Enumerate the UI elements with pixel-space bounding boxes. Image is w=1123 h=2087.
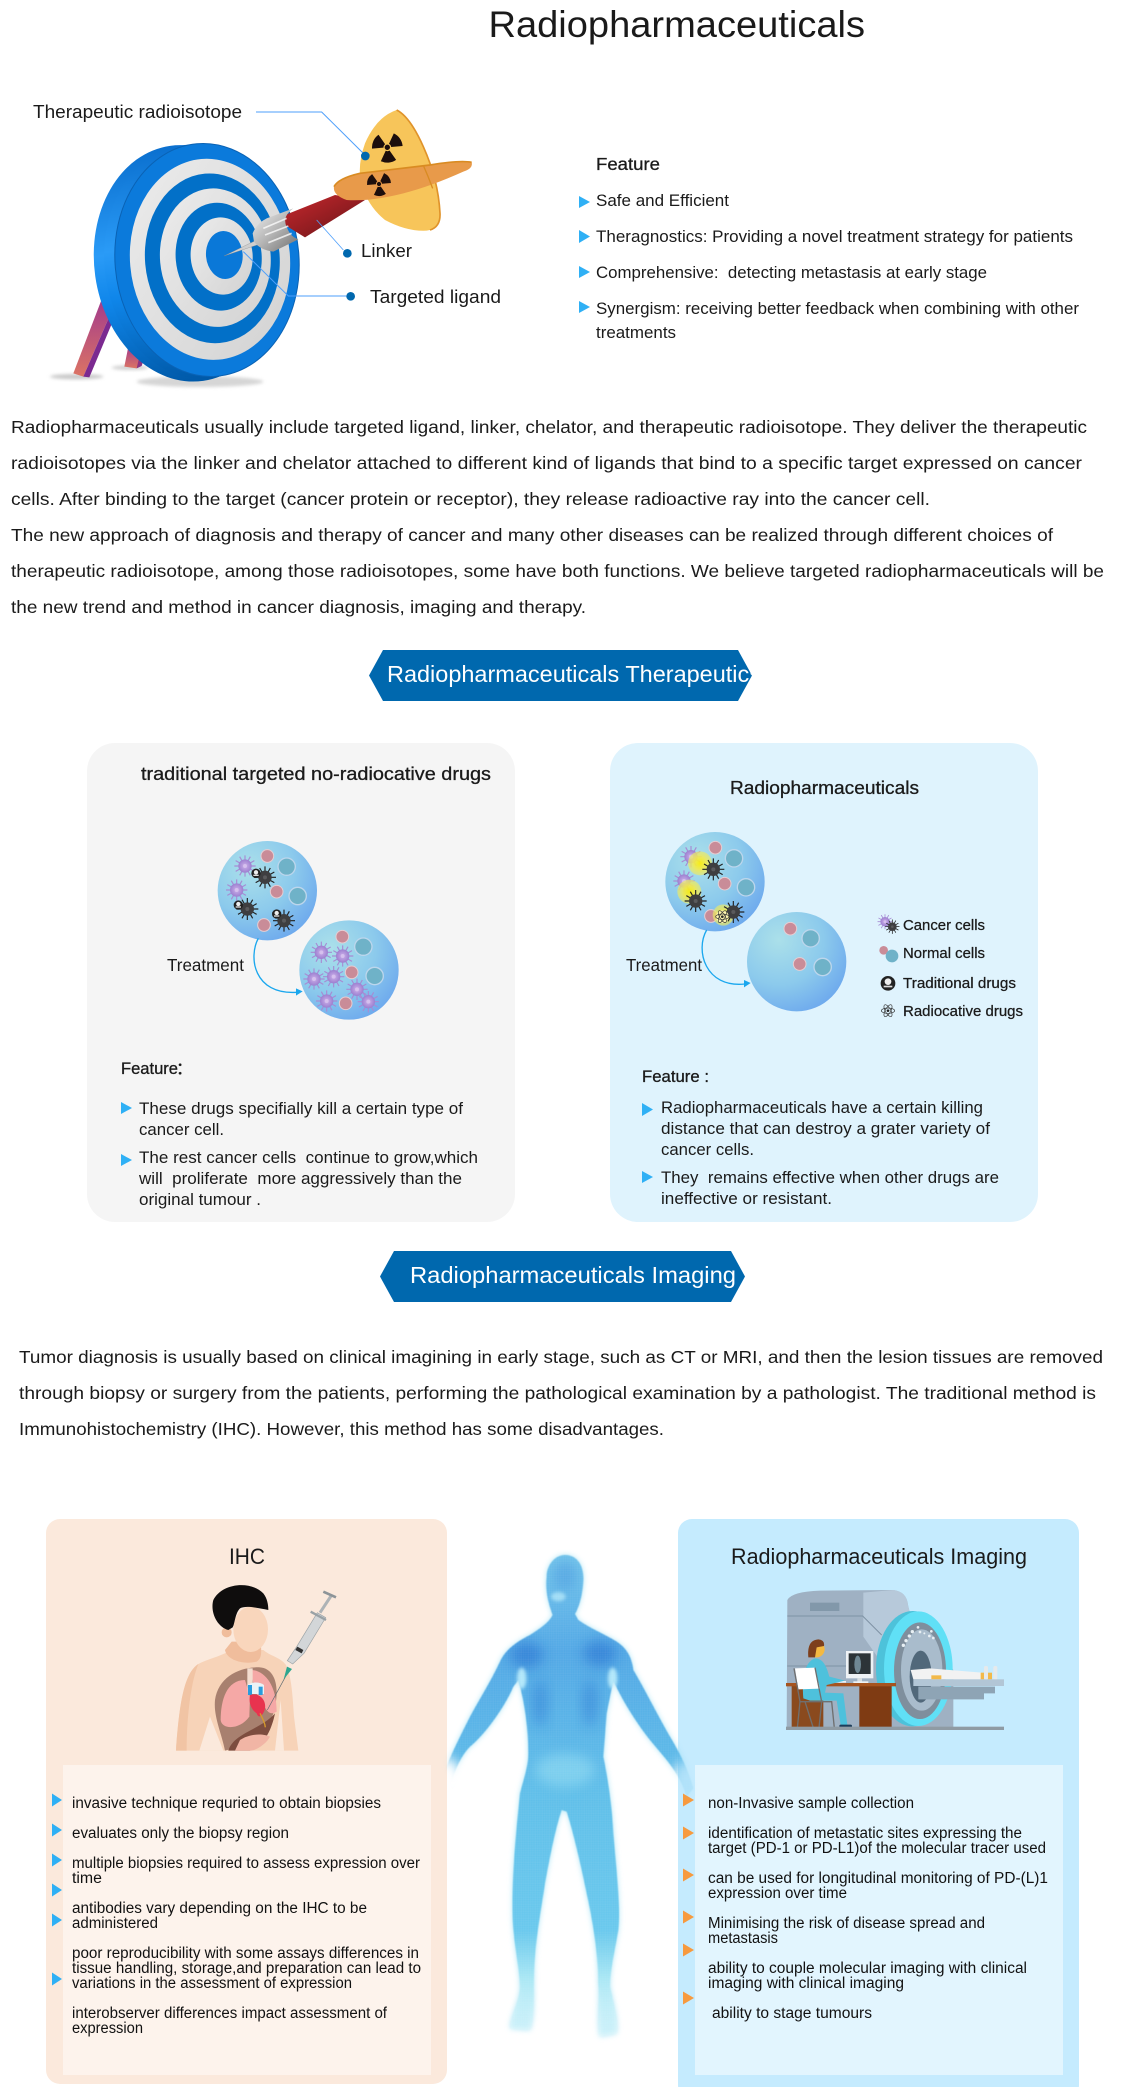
imaging paragraph: Tumor diagnosis is usually based on clinical imagining in early stage, such as CT or MRI, and then the lesion tissues are removed [19,1347,1103,1367]
list: IHC disadvantages: poor reproducibility with some assays differences in [72,1945,419,1962]
list: IHC disadvantages: administered [72,1915,158,1932]
list: imaging advantages: target (PD-1 or PD-L1)of the molecular tracer used [708,1840,1046,1857]
callout dots [343,152,370,301]
illustration: glowing human body [446,1552,694,2040]
list: imaging advantages: imaging with clinical imaging [708,1975,904,1992]
bullet: safe and efficient: Safe and Efficient [596,192,729,210]
legend labels: Normal cells [903,946,985,962]
label: treatment: Treatment [167,955,244,975]
icon: dart shaft [283,195,365,237]
callout lines [243,112,363,296]
tumour after treatment [747,912,846,1011]
panel: IHC [46,1519,447,2084]
icon: organs [215,1667,277,1751]
icon: yellow vertical fin [360,110,440,231]
list: IHC disadvantages: invasive technique requried to obtain biopsies [72,1795,381,1812]
list: IHC disadvantages: interobserver differences impact assessment of [72,2005,388,2022]
list: IHC disadvantages: multiple biopsies required to assess expression over [72,1855,420,1872]
list: imaging advantages [708,1795,1048,2022]
icon: head and hair [212,1585,268,1652]
list: IHC disadvantages: tissue handling, storage,and preparation can lead to [72,1960,421,1977]
bullet: specific kill: cancer cell. [139,1121,224,1139]
bullet: killing distance: distance that can destroy a grater variety of [661,1120,990,1138]
bullet: remains effective [642,1169,999,1208]
legend labels [903,918,1023,1020]
icon: scanner housing [787,1590,953,1727]
list markers [52,1794,62,1986]
icon: dart barrel and needle [224,208,298,256]
label: treatment: Treatment [626,955,702,975]
illustration: scanner with operator [786,1590,1004,1730]
icon: syringe [267,1592,336,1710]
list: imaging advantages: non-Invasive sample collection [708,1795,914,1812]
bullet: remains effective: They remains effective when other drugs are [661,1169,999,1187]
panel: radiopharmaceuticals imaging [678,1519,1079,2087]
list markers [683,1794,694,2004]
intro paragraph [11,417,1104,617]
heading: feature: Feature [596,154,660,174]
imaging paragraph: through biopsy or surgery from the patients, performing the pathological examination by a pathologist. The traditional method is [19,1383,1096,1403]
list: imaging advantages: metastasis [708,1930,778,1947]
bullet: killing distance [642,1099,990,1159]
icon: target stand and shadows [50,299,263,387]
intro paragraph: cells. After binding to the target (cancer protein or receptor), they release radioactive ray into the cancer cell. [11,489,930,509]
icon: floor [786,1727,1004,1730]
bullet: comprehensive: Comprehensive: detecting metastasis at early stage [596,264,987,282]
bullet: specific kill [121,1100,463,1139]
intro paragraph: radioisotopes via the linker and chelator attached to different kind of ligands that bind to a specific target expressed on cancer [11,453,1082,473]
feature list [579,154,1080,342]
bullet: remains effective: ineffective or resistant. [661,1190,832,1208]
list: IHC disadvantages: time [72,1870,102,1887]
dart and target illustration [50,110,472,394]
banner: radiopharmaceuticals imaging: Radiopharmaceuticals Imaging [410,1262,736,1288]
panel: traditional targeted drugs [87,743,515,1222]
cell diagram: before and after treatment [218,841,399,1020]
panel inner list background [695,1765,1063,2075]
feature heading: Feature [121,1060,178,1078]
list: imaging advantages: Minimising the risk of disease spread and [708,1915,985,1932]
icon: patient table [911,1666,1004,1699]
legend labels: Traditional drugs [903,976,1016,992]
arrow: treatment [702,930,751,987]
label: linker: Linker [361,241,412,261]
icon: desk and monitor [786,1651,896,1728]
panel heading: traditional targeted no-radiocative drugs [141,764,491,784]
bullet: rest cancer cells [121,1149,478,1209]
banner: radiopharmaceuticals imaging [380,1251,745,1302]
banner: radiopharmaceuticals therapeutics [369,650,761,701]
arrow: treatment [254,938,303,996]
list: IHC disadvantages: evaluates only the biopsy region [72,1825,289,1842]
icon: operator and chair [794,1639,852,1728]
intro paragraph: The new approach of diagnosis and therapy of cancer and many other diseases can be realized through different choices of [11,525,1053,545]
bullet: synergism [579,300,1080,342]
icon: scanner ring [876,1611,953,1726]
tumour before treatment [218,841,317,940]
panel heading: Radiopharmaceuticals [730,778,919,798]
imaging paragraph [19,1347,1103,1439]
icon: orange horizontal fin [334,162,472,200]
list: IHC disadvantages: variations in the assessment of expression [72,1975,352,1992]
legend icons [878,914,899,1018]
panel inner list background [63,1765,431,2075]
illustration: torso with organs and syringe [176,1585,336,1751]
icon: bullseye target [79,133,309,394]
bullet: specific kill: These drugs specifially kill a certain type of [139,1100,463,1118]
tumour before treatment [665,832,765,931]
panel: radiopharmaceuticals [610,743,1038,1222]
list: IHC disadvantages: antibodies vary depending on the IHC to be [72,1900,367,1917]
feature heading: ： [176,1060,192,1078]
panel heading: Radiopharmaceuticals Imaging [731,1544,1027,1569]
tumour after treatment [299,920,399,1020]
bullet: synergism: Synergism: receiving better feedback when combining with other [596,300,1080,318]
list: IHC disadvantages: expression [72,2020,143,2037]
label: therapeutic radioisotope: Therapeutic radioisotope [33,102,242,122]
intro paragraph: the new trend and method in cancer diagnosis, imaging and therapy. [11,597,586,617]
list: imaging advantages: ability to stage tumours [712,2005,872,2022]
intro paragraph: therapeutic radioisotope, among those radioisotopes, some have both functions. We believe targeted radiopharmaceuticals will be [11,561,1104,581]
label: targeted ligand: Targeted ligand [370,287,501,307]
panel heading: IHC [229,1544,265,1569]
bullet: killing distance: Radiopharmaceuticals have a certain killing [661,1099,983,1117]
list: imaging advantages: identification of metastatic sites expressing the [708,1825,1022,1842]
title: Radiopharmaceuticals [488,4,865,45]
legend labels: Cancer cells [903,918,985,934]
cell diagram: before and after treatment [665,832,899,1018]
bullet: theragnostics: Theragnostics: Providing a novel treatment strategy for patients [596,228,1073,246]
bullet: rest cancer cells: The rest cancer cells continue to grow,which [139,1149,478,1167]
list: imaging advantages: ability to couple molecular imaging with clinical [708,1960,1027,1977]
list: IHC disadvantages [72,1795,421,2037]
legend labels: Radiocative drugs [903,1004,1023,1020]
bullet: killing distance: cancer cells. [661,1141,754,1159]
bullet: rest cancer cells: will proliferate more aggressively than the [138,1170,462,1188]
imaging paragraph: Immunohistochemistry (IHC). However, this method has some disadvantages. [19,1419,664,1439]
bullet: rest cancer cells: original tumour . [139,1191,261,1209]
banner: radiopharmaceuticals therapeutics: Radiopharmaceuticals Therapeutics [387,661,761,687]
intro paragraph: Radiopharmaceuticals usually include targeted ligand, linker, chelator, and therapeutic radioisotope. They deliver the therapeutic [11,417,1087,437]
list: imaging advantages: can be used for longitudinal monitoring of PD-(L)1 [708,1870,1048,1887]
list: imaging advantages: expression over time [708,1885,847,1902]
feature heading: Feature : [642,1068,709,1086]
icon: torso [176,1642,298,1751]
bullet: synergism: treatments [596,324,676,342]
